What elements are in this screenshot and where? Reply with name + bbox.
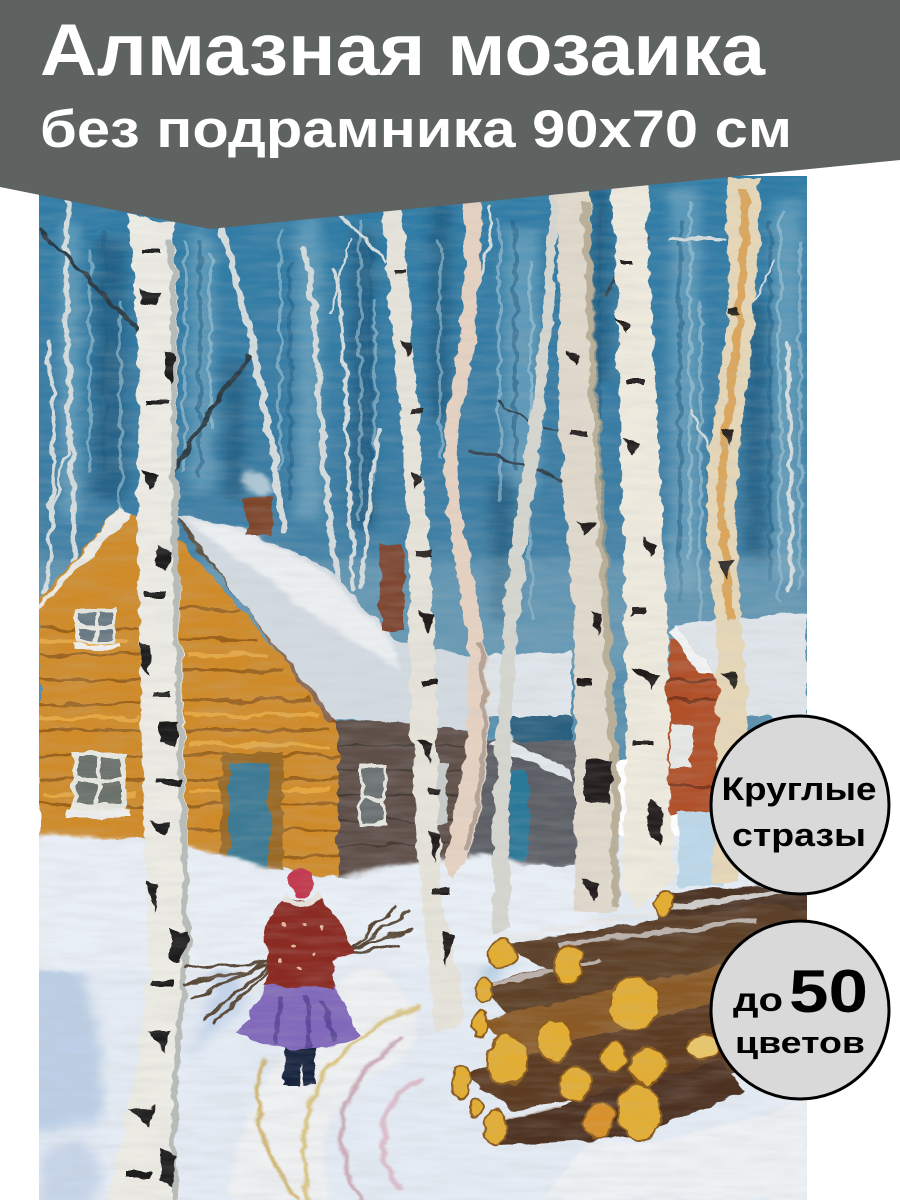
badge: up to 50 colours: до [733,981,783,1018]
birch tree: far left [105,214,192,1200]
badge: up to 50 colours: цветов [735,1025,865,1060]
birch tree: wide right [552,182,619,912]
cabin door [221,752,283,870]
birch tree: orange far right [707,178,760,885]
head scarf [288,866,314,896]
woman with firewood [186,866,412,1086]
badge: up to 50 colours [711,921,889,1099]
coat [266,898,356,988]
title: Алмазная мозаика [40,10,767,91]
back right cabin [668,612,807,887]
lower window [68,752,132,818]
skirt [235,985,360,1049]
upper window [72,607,122,649]
subtitle: без подрамника 90х70 см [40,100,792,159]
snowy ground [20,835,830,1200]
middle cabin [460,650,575,865]
distant bare trees and branches [40,200,791,590]
main cabin [39,471,468,880]
birch tree: wide far right [610,178,674,905]
snow banks in front of cabin [20,835,600,970]
header banner [0,0,900,229]
sky and forest background [20,160,830,760]
badge: round rhinestones: стразы [732,817,866,853]
brushwood bundle [186,908,412,1022]
badge: up to 50 colours: 50 [789,958,868,1025]
badge: round rhinestones [711,716,889,894]
log pile [452,878,830,1145]
legs [284,1048,316,1086]
birch tree: center thin [382,204,462,1032]
birch tree: center pink [443,195,488,880]
painting: winter birch forest [20,160,830,1200]
badge: round rhinestones: Круглые [722,771,876,807]
birch tree: thin right of center [492,190,560,935]
